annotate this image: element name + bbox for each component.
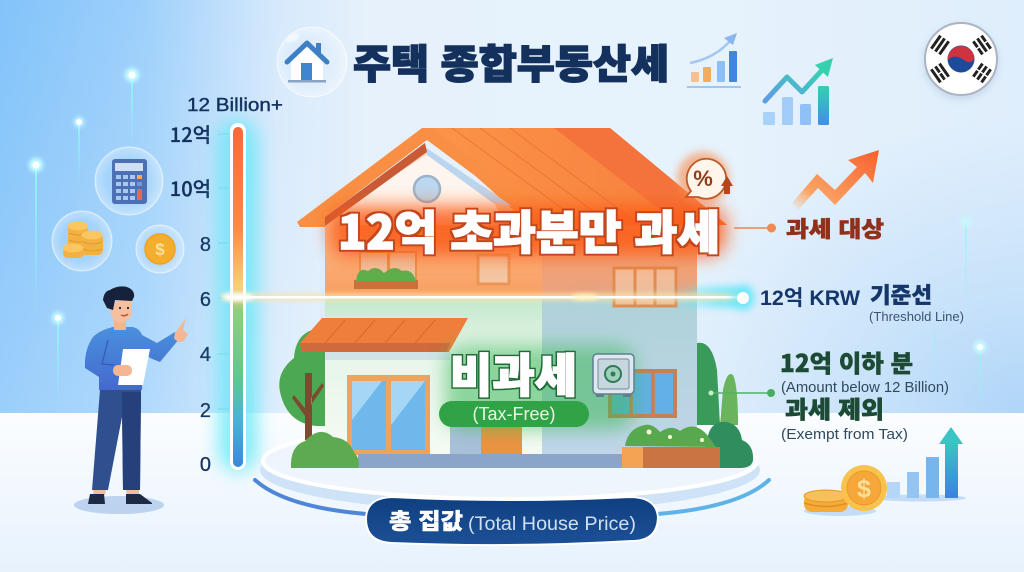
decorative light pillars — [29, 68, 986, 408]
scale tick numbers: 0 — [200, 454, 211, 476]
scale tick numbers: 10억 — [170, 173, 211, 202]
callout: below threshold exempt: 12억 이하 분 — [780, 344, 913, 379]
scale top label: 12 Billion+ — [187, 94, 283, 115]
upper center window — [478, 255, 509, 284]
threshold line — [222, 286, 755, 310]
scale tick numbers — [170, 119, 211, 476]
ground platform — [255, 423, 769, 514]
callout: below threshold exempt: (Amount below 12 Billion) — [781, 380, 949, 396]
glow for tax-free label — [445, 345, 635, 430]
house — [279, 128, 753, 468]
person pointing — [74, 286, 188, 514]
front door and steps — [450, 420, 523, 468]
tree — [279, 328, 325, 440]
callout: threshold line: 기준선 — [870, 278, 932, 310]
shrubs right — [697, 343, 753, 468]
icon: house in bubble — [277, 27, 347, 97]
arrow: orange rising — [792, 150, 879, 210]
heading: tax free: 비과세 — [450, 340, 577, 406]
callout: threshold line: (Threshold Line) — [869, 309, 964, 324]
roof — [297, 128, 727, 227]
icon: percent speech bubble — [677, 152, 733, 204]
icon: coins and rising bars — [804, 427, 966, 516]
scale tick numbers: 2 — [200, 400, 211, 422]
upper left window with flower box — [354, 252, 418, 289]
icon: coins and rising bars: $ — [857, 475, 871, 503]
icon: growth chart — [763, 58, 833, 125]
callout: tax target: 과세 대상 — [786, 212, 884, 244]
callout: below threshold exempt — [708, 344, 949, 443]
icon: South Korean flag — [924, 23, 998, 99]
icon: dollar coin in bubble — [136, 225, 184, 273]
bush left — [291, 432, 359, 468]
lower walls — [325, 298, 543, 466]
total house price pill — [366, 497, 658, 545]
upper right window — [614, 268, 676, 306]
icon: small bar chart by title — [687, 33, 741, 88]
scale tick numbers: 4 — [200, 344, 211, 366]
thermometer bar — [230, 123, 246, 470]
lower right window — [608, 369, 677, 418]
callout: below threshold exempt: 과세 제외 — [785, 390, 884, 425]
glow for tax label — [330, 206, 726, 256]
thermometer glow — [218, 120, 258, 472]
scale axis with labels — [170, 94, 283, 476]
scale tick numbers: 8 — [200, 234, 211, 256]
callout: below threshold exempt: (Exempt from Tax) — [781, 427, 908, 443]
total house price pill: (Total House Price) — [468, 514, 636, 535]
icon: percent speech bubble: % — [693, 166, 713, 191]
callout: threshold line: 12억 KRW — [760, 287, 860, 310]
scale tick numbers: 6 — [200, 289, 211, 311]
glass door — [347, 375, 430, 455]
heading: taxed portion: 12억 초과분만 과세 — [338, 197, 720, 263]
icon: coins in bubble — [52, 211, 112, 271]
tax-free pill — [439, 401, 589, 427]
planter — [622, 425, 720, 468]
porch awning — [300, 318, 468, 352]
tax-free pill: (Tax-Free) — [472, 404, 556, 424]
icon: calculator in bubble — [95, 147, 163, 215]
callout: tax target — [734, 212, 884, 244]
total house price pill: 총 집값 — [389, 504, 463, 536]
foundation — [358, 454, 698, 468]
title: 주택 종합부동산세 — [353, 32, 669, 90]
icon: dollar coin in bubble: $ — [155, 240, 165, 259]
icon: safe — [593, 354, 634, 397]
callout: threshold line — [760, 278, 964, 324]
upper walls — [325, 150, 543, 298]
scale tick numbers: 12억 — [170, 119, 211, 148]
